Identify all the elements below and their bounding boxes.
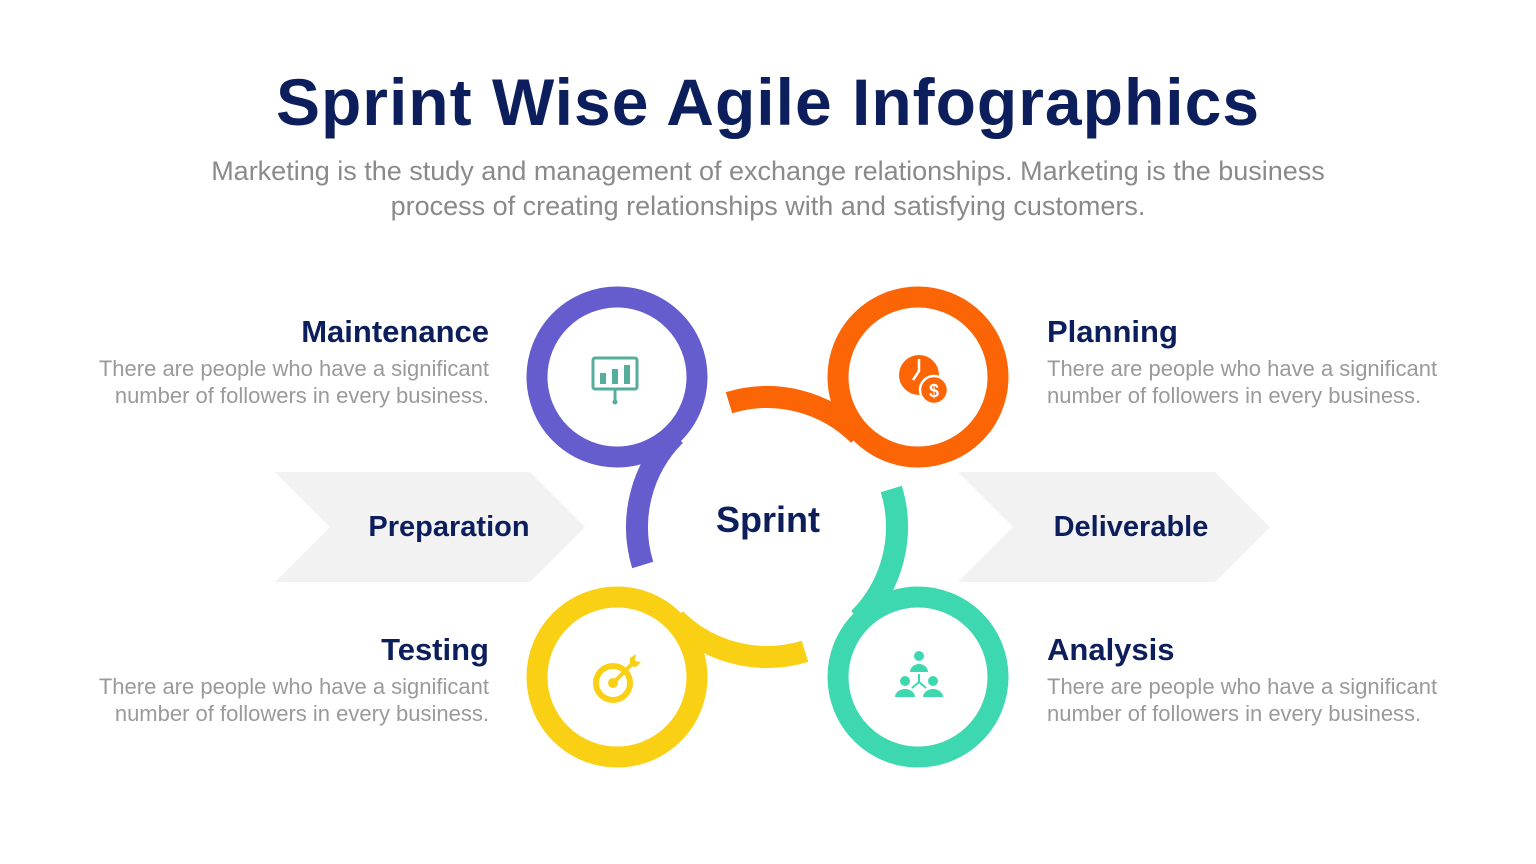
ring: planning (838, 297, 998, 457)
text block: testing (99, 632, 489, 726)
text block: planning: There are people who have a significant number of followers in every business. (1047, 356, 1437, 408)
icon: presentation chart (593, 358, 637, 402)
subtitle: Marketing is the study and management of exchange relationships. Marketing is the business process of creating relationships with and satisfying customers. (211, 156, 1325, 221)
text block: testing: Testing (381, 632, 489, 667)
arc: orange (729, 397, 859, 435)
arc: purple (637, 435, 675, 565)
text block: planning (1047, 314, 1437, 408)
arc: yellow (675, 619, 805, 657)
text block: analysis: Analysis (1047, 632, 1175, 667)
text block: analysis (1047, 632, 1437, 726)
chevron: preparation (275, 472, 585, 582)
chevron: deliverable (958, 472, 1270, 582)
text block: testing: There are people who have a significant number of followers in every business. (99, 674, 489, 726)
arc: green (859, 489, 897, 619)
ring: testing (537, 597, 697, 757)
text block: maintenance: There are people who have a significant number of followers in every business. (99, 356, 489, 408)
chevron: deliverable: Deliverable (1054, 511, 1208, 543)
icon: team hierarchy (895, 651, 943, 697)
text block: maintenance (99, 314, 489, 408)
icon: clock dollar (899, 355, 939, 395)
text block: planning: Planning (1047, 314, 1178, 349)
text block: maintenance: Maintenance (301, 314, 489, 349)
ring: planning: $ (929, 381, 939, 401)
icon: target (596, 666, 630, 700)
chevron: preparation: Preparation (368, 511, 530, 543)
title: Sprint Wise Agile Infographics (276, 65, 1260, 139)
center label: sprint: Sprint (716, 499, 820, 540)
ring: maintenance (537, 297, 697, 457)
text block: analysis: There are people who have a significant number of followers in every business. (1047, 674, 1437, 726)
ring: analysis (838, 597, 998, 757)
